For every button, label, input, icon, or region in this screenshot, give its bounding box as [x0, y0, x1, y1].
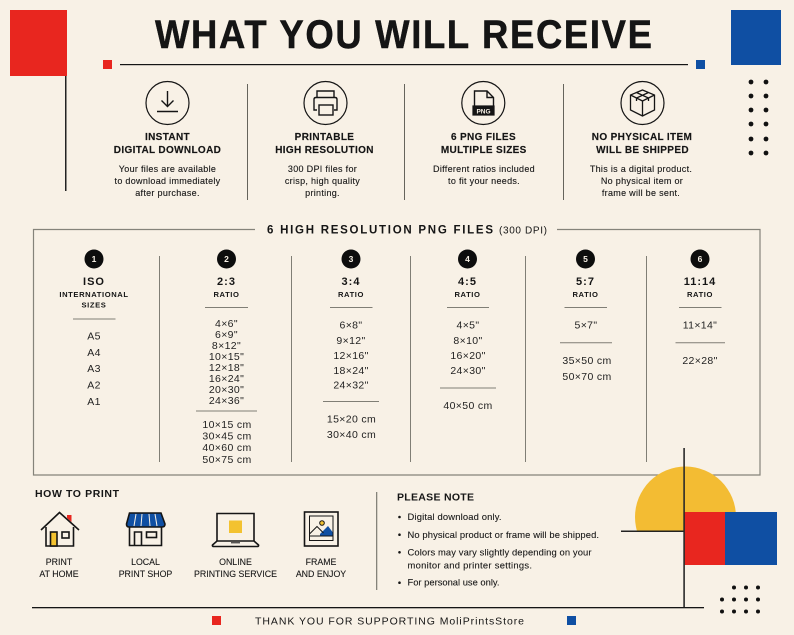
column: 2:3 ratio: 4×6" — [215, 318, 238, 330]
heading: how to print: HOW TO PRINT — [35, 488, 120, 500]
feature: printable high resolution — [275, 82, 374, 198]
feature: no physical item: NO PHYSICAL ITEM — [592, 132, 692, 143]
column: 3:4 ratio: 9×12" — [336, 335, 366, 347]
column: 2:3 ratio: 2 — [224, 254, 229, 264]
column: 11:14 ratio: RATIO — [687, 290, 713, 299]
feature: 6 png files: 6 PNG FILES — [451, 132, 516, 143]
option: online printing service — [194, 514, 277, 579]
column: ISO: A5 — [87, 330, 101, 342]
column: 5:7 ratio — [560, 250, 612, 383]
column: 3:4 ratio: 12×16" — [333, 350, 369, 362]
column: 5:7 ratio: RATIO — [572, 290, 599, 299]
column: 11:14 ratio: 6 — [698, 254, 703, 264]
decoration: dot grid top right — [749, 80, 768, 155]
option: frame and enjoy: FRAME — [306, 557, 337, 567]
column: 3:4 ratio: 15×20 cm — [327, 414, 376, 426]
column: 4:5 ratio: 16×20" — [450, 350, 486, 362]
column: 5:7 ratio: 35×50 cm — [562, 355, 612, 367]
column: ISO: A3 — [87, 363, 101, 375]
column: ISO: A4 — [87, 347, 101, 359]
decoration: geometric composition — [621, 448, 777, 607]
feature: printable high resolution: PRINTABLE — [295, 132, 354, 143]
icon: framed picture — [304, 512, 338, 546]
option: local print shop: PRINT SHOP — [119, 569, 172, 579]
feature: printable high resolution: printing. — [305, 188, 340, 198]
feature: no physical item: This is a digital product. — [590, 164, 692, 174]
feature: instant digital download — [114, 82, 221, 198]
column: 4:5 ratio: 24×30" — [450, 365, 486, 377]
option: frame and enjoy: AND ENJOY — [296, 569, 346, 579]
panel heading note: (300 DPI) — [499, 226, 547, 236]
feature: 6 png files: MULTIPLE SIZES — [441, 145, 527, 156]
column: ISO: ISO — [83, 276, 105, 288]
icon: laptop — [212, 514, 259, 546]
decoration: dot grid bottom right — [720, 586, 760, 614]
column: 3:4 ratio: RATIO — [338, 290, 364, 299]
column: ISO: A1 — [87, 396, 101, 408]
option: print at home: AT HOME — [39, 569, 79, 579]
column: 3:4 ratio: 24×32" — [333, 380, 369, 392]
icon: printer — [304, 82, 347, 124]
option: online printing service: PRINTING SERVICE — [194, 569, 277, 579]
column: 3:4 ratio: 18×24" — [333, 365, 369, 377]
panel: please note: No physical product or frame will be shipped. — [408, 529, 599, 540]
feature: printable high resolution: 300 DPI files for — [288, 164, 357, 174]
panel: 6 high resolution png files — [34, 224, 760, 475]
column: 2:3 ratio: 20×30" — [209, 384, 244, 396]
column: 2:3 ratio: 40×60 cm — [202, 442, 252, 454]
column: ISO: INTERNATIONAL — [59, 290, 129, 299]
column: 5:7 ratio: 5:7 — [576, 276, 595, 288]
option: print at home: PRINT — [46, 557, 73, 567]
option: print at home — [39, 512, 79, 579]
column: ISO: SIZES — [82, 300, 106, 310]
column: 4:5 ratio: 4:5 — [458, 276, 477, 288]
icon: house — [41, 512, 79, 546]
feature: instant digital download: after purchase. — [135, 188, 200, 198]
feature: 6 png files: to fit your needs. — [448, 176, 520, 186]
column: 2:3 ratio: 16×24" — [209, 373, 244, 385]
column: 5:7 ratio: 5 — [583, 254, 588, 264]
column: 3:4 ratio: 6×8" — [340, 320, 362, 332]
option: local print shop: LOCAL — [131, 557, 160, 567]
column: 4:5 ratio — [440, 250, 496, 412]
panel: please note: monitor and printer settings. — [408, 560, 532, 570]
column: 4:5 ratio: 4 — [465, 254, 470, 264]
column: ISO: 1 — [92, 254, 97, 264]
option: frame and enjoy — [296, 512, 346, 579]
panel: please note: Colors may vary slightly depending on your — [408, 546, 592, 558]
feature: printable high resolution: crisp, high quality — [285, 176, 360, 186]
feature: instant digital download: DIGITAL DOWNLOAD — [114, 145, 221, 156]
feature: no physical item: No physical item or — [601, 176, 683, 186]
title rule with square accents — [103, 60, 705, 69]
icon: box — [621, 82, 664, 124]
column: 2:3 ratio: 2:3 — [217, 276, 236, 288]
column: 5:7 ratio: 50×70 cm — [562, 371, 612, 383]
feature: no physical item: frame will be sent. — [602, 188, 680, 198]
column: 11:14 ratio: 11:14 — [684, 276, 716, 288]
column: 4:5 ratio: 40×50 cm — [443, 400, 493, 412]
column: 3:4 ratio — [323, 250, 379, 441]
decoration: top right blue square — [731, 10, 781, 65]
option: online printing service: ONLINE — [219, 557, 252, 567]
column: ISO — [59, 250, 129, 408]
feature: instant digital download: to download immediately — [115, 176, 221, 186]
column: 3:4 ratio: 30×40 cm — [327, 429, 376, 441]
option: local print shop — [119, 513, 172, 579]
column: 11:14 ratio: 22×28" — [682, 355, 718, 367]
footer: THANK YOU FOR SUPPORTING MoliPrintsStore — [255, 616, 524, 628]
column: 2:3 ratio: 30×45 cm — [202, 430, 252, 442]
column: 2:3 ratio: 50×75 cm — [202, 454, 252, 466]
column: 11:14 ratio: 11×14" — [683, 320, 717, 332]
column: 4:5 ratio: 8×10" — [453, 335, 483, 347]
column: 2:3 ratio: 24×36" — [209, 395, 244, 407]
panel: please note: Digital download only. — [408, 511, 502, 522]
column: 2:3 ratio: RATIO — [213, 290, 240, 299]
feature: instant digital download: INSTANT — [145, 132, 190, 143]
icon: download — [146, 82, 189, 124]
column: 2:3 ratio — [196, 250, 257, 466]
icon: png file: PNG — [476, 108, 491, 115]
feature: no physical item — [590, 82, 692, 198]
feature: printable high resolution: HIGH RESOLUTION — [275, 145, 374, 156]
column: 2:3 ratio: 10×15 cm — [202, 419, 252, 431]
feature: instant digital download: Your files are available — [119, 164, 216, 174]
panel heading: 6 HIGH RESOLUTION PNG FILES — [267, 224, 493, 236]
column: 4:5 ratio: RATIO — [454, 290, 481, 299]
icon: shop — [126, 513, 165, 546]
panel: please note: For personal use only. — [408, 576, 500, 588]
decoration: top left red square and line — [10, 10, 67, 191]
column: 2:3 ratio: 12×18" — [209, 362, 244, 374]
feature: no physical item: WILL BE SHIPPED — [596, 145, 689, 156]
feature: 6 png files — [433, 82, 535, 186]
title: WHAT YOU WILL RECEIVE — [155, 13, 652, 57]
column: 11:14 ratio — [676, 250, 725, 367]
column: 4:5 ratio: 4×5" — [457, 320, 479, 332]
panel: please note — [397, 492, 599, 588]
column: 2:3 ratio: 6×9" — [215, 329, 238, 341]
column: 2:3 ratio: 10×15" — [209, 351, 244, 363]
feature: 6 png files: Different ratios included — [433, 164, 535, 174]
column: 2:3 ratio: 8×12" — [212, 340, 241, 352]
column: ISO: A2 — [87, 380, 101, 392]
panel: please note: PLEASE NOTE — [397, 492, 474, 504]
column: 3:4 ratio: 3 — [349, 254, 354, 264]
column: 5:7 ratio: 5×7" — [575, 320, 597, 332]
column: 3:4 ratio: 3:4 — [342, 276, 360, 288]
